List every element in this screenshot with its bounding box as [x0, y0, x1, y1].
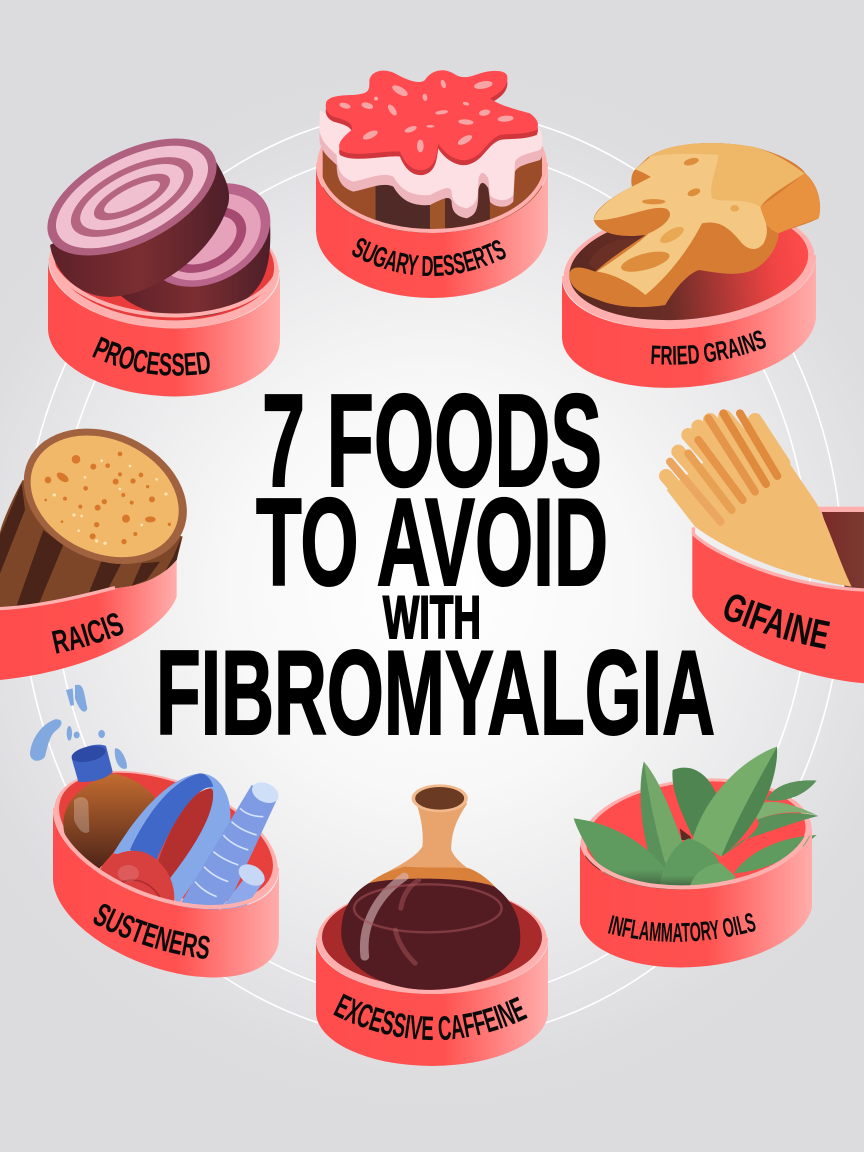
food: bread log: [0, 403, 209, 610]
bowl: processed: [47, 138, 280, 396]
bowl front: [316, 163, 548, 298]
bowl: sugary desserts: [316, 70, 548, 298]
bowl front: [580, 827, 812, 967]
bowl: inflammatory oils: [574, 746, 818, 968]
bowl: fried grains: [562, 143, 820, 388]
title line: to avoid: TO AVOID: [256, 474, 608, 612]
bowl back: [36, 744, 296, 936]
orbit rings: [21, 109, 843, 1041]
label: excessive caffeine: EXCESSIVE CAFFEINE: [333, 994, 528, 1040]
bowl back: [575, 769, 817, 905]
label: sugary desserts: SUGARY DESSERTS: [352, 238, 506, 276]
label: gifaine: GIFAINE: [724, 594, 830, 649]
bowl: susteners: [30, 684, 279, 978]
bowl: gifaine: [659, 409, 864, 684]
bowl front: [53, 808, 279, 977]
food: dark liquid flask: [341, 784, 520, 990]
bowl front: [0, 560, 177, 680]
label: susteners: SUSTENERS: [94, 904, 210, 959]
bowl front: [692, 527, 864, 683]
title line: 7 foods: 7 FOODS: [262, 367, 602, 514]
food: frosted cake: [319, 70, 542, 237]
bowl back: [317, 886, 547, 994]
label: inflammatory oils: INFLAMMATORY OILS: [608, 913, 756, 942]
bowl: raicis: [0, 428, 187, 680]
food: sliced beets: [29, 114, 288, 317]
label: processed: PROCESSED: [92, 336, 210, 376]
food: bottle, band, tubes, droplets: [30, 685, 282, 910]
bowl front: [562, 255, 816, 388]
label: fried grains: FRIED GRAINS: [651, 330, 766, 365]
bowl back: [557, 194, 821, 340]
title: [156, 367, 715, 760]
bowl front: [48, 258, 280, 396]
bowl inner: [817, 507, 864, 593]
food: fried dough: [569, 143, 820, 307]
title line: with: WITH: [383, 584, 481, 651]
food: wooden comb: [666, 413, 852, 587]
food: green leaves: [574, 747, 818, 890]
bowl back: [317, 97, 547, 233]
bowl front: [316, 938, 548, 1066]
label: raicis: RAICIS: [52, 613, 124, 654]
bowl back: [45, 196, 283, 336]
bowl: excessive caffeine: [316, 784, 548, 1066]
